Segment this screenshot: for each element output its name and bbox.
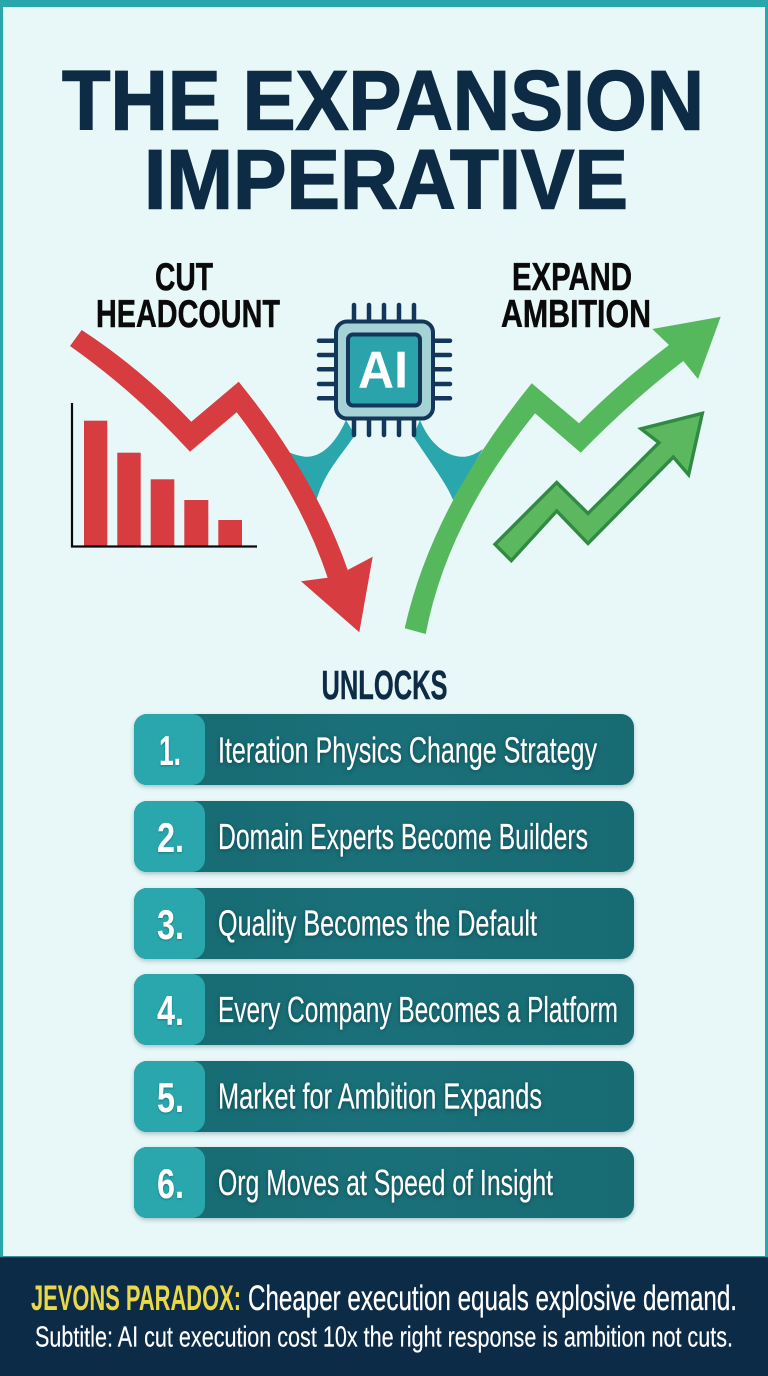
list item 5: 5. xyxy=(157,1074,184,1121)
list item 6: 6. xyxy=(157,1160,184,1207)
list item 4: 4. xyxy=(157,987,184,1034)
arrow: green upward large xyxy=(405,317,721,634)
arrow: red downward xyxy=(70,330,373,632)
list item 3: Quality Becomes the Default xyxy=(218,902,537,944)
footer: jevons paradox headline xyxy=(31,1279,737,1318)
heading: cut headcount xyxy=(96,256,280,336)
bar chart: declining headcount xyxy=(72,403,257,546)
list item 1 xyxy=(134,714,634,785)
icon: AI chip: AI xyxy=(358,342,408,400)
heading: cut headcount: HEADCOUNT xyxy=(96,293,280,336)
list item 2: Domain Experts Become Builders xyxy=(218,816,588,857)
connector: chip to green arrow xyxy=(413,420,483,500)
list item 2: 2. xyxy=(157,814,184,861)
heading: expand ambition: AMBITION xyxy=(501,293,651,336)
heading: expand ambition xyxy=(501,256,651,336)
icon: AI chip xyxy=(319,305,450,435)
title: IMPERATIVE xyxy=(144,132,628,226)
list item 1: Iteration Physics Change Strategy xyxy=(218,730,597,770)
list item 3 xyxy=(134,888,634,959)
list item 5: Market for Ambition Expands xyxy=(218,1076,542,1116)
list item 5 xyxy=(134,1061,634,1132)
list item 1: 1. xyxy=(159,727,181,774)
title xyxy=(62,54,704,226)
footer: jevons paradox headline: JEVONS PARADOX: xyxy=(31,1279,241,1318)
title: THE EXPANSION xyxy=(62,54,704,148)
footer banner xyxy=(0,1256,768,1376)
list item 3: 3. xyxy=(157,901,184,948)
heading: unlocks: UNLOCKS xyxy=(322,662,448,708)
list item 6: Org Moves at Speed of Insight xyxy=(218,1162,553,1203)
heading: cut headcount: CUT xyxy=(155,256,213,299)
heading: expand ambition: EXPAND xyxy=(512,256,632,299)
arrow: green upward small xyxy=(495,413,702,561)
list item 6 xyxy=(134,1147,634,1218)
connector: chip to red arrow xyxy=(288,420,355,499)
list item 2 xyxy=(134,801,634,872)
list item 4 xyxy=(134,974,634,1045)
